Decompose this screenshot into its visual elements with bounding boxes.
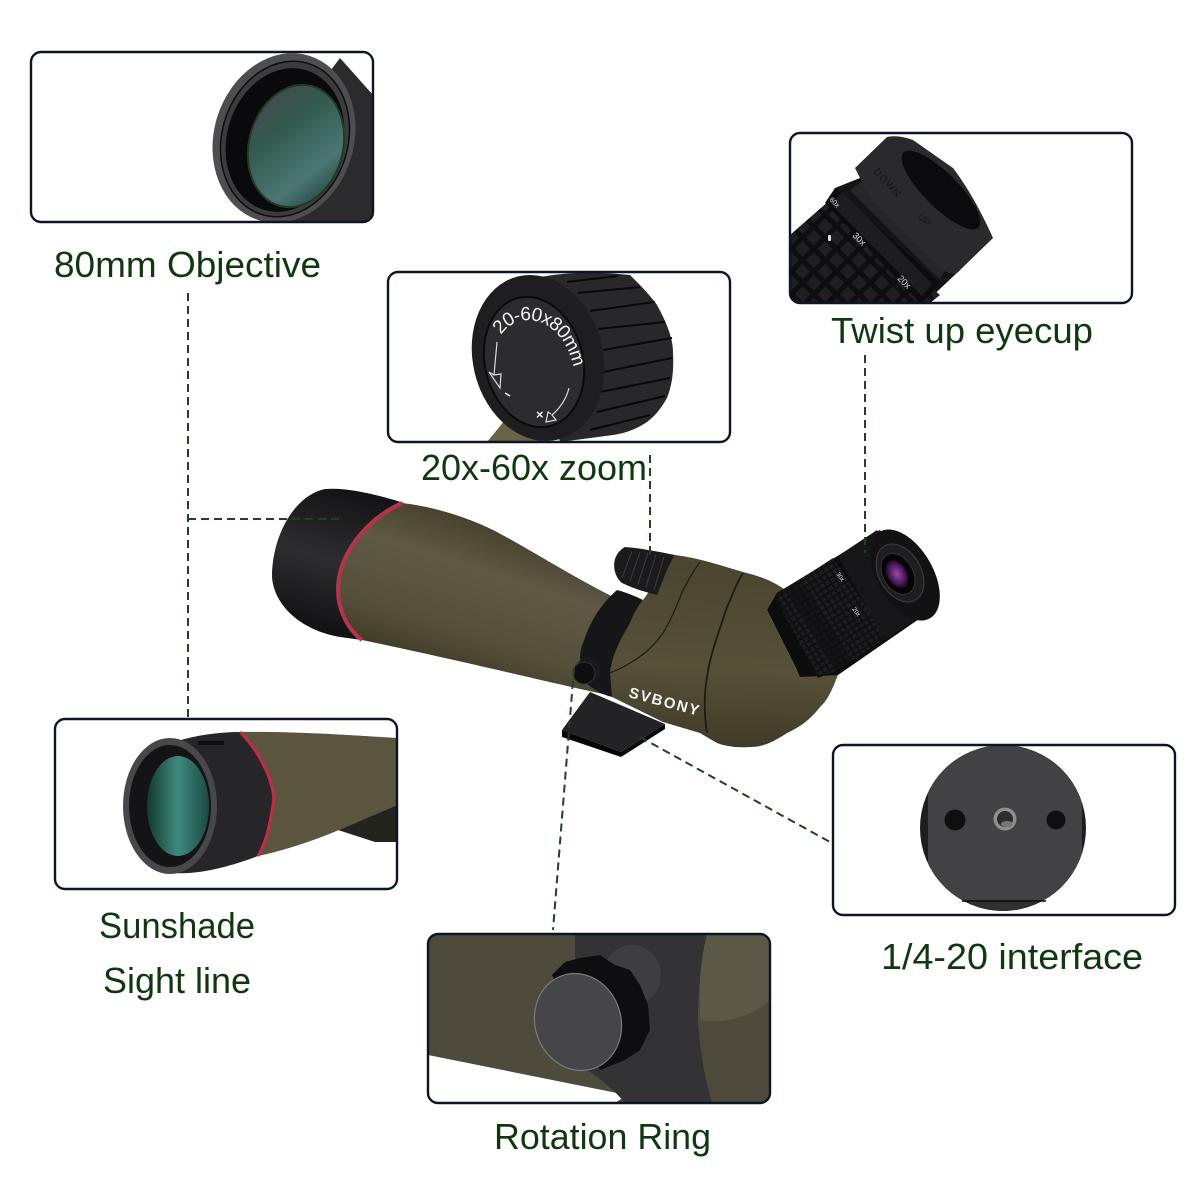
panel: 20x-60x zoom: 20-60x80mm: [493, 306, 583, 366]
heading: Sunshade Sight line: Sunshade: [99, 905, 255, 946]
scope body: [338, 503, 630, 696]
main product: spotting scope: [272, 489, 954, 757]
base ring: [767, 530, 932, 677]
eyepiece lens: [881, 556, 913, 592]
panel: twist up eyecup: DOWN: [871, 167, 903, 200]
scope sunshade: [272, 489, 404, 640]
panel: twist up eyecup: 60x: [828, 196, 841, 210]
panel: 1/4-20 interface: [833, 745, 1175, 915]
focus knob: [614, 547, 675, 595]
clamp ring: [580, 590, 643, 697]
center threaded hole: [994, 808, 1016, 830]
eyepiece: 20x: [850, 607, 861, 618]
red ring: [338, 503, 402, 640]
eyepiece: 30x: [834, 572, 845, 583]
housing seams: [610, 562, 743, 733]
panel: sunshade sight line: [55, 719, 397, 889]
panel: twist up eyecup: UP: [915, 212, 933, 229]
heading: 80mm Objective: 80mm Objective: [54, 244, 321, 285]
foot plate: [562, 692, 665, 757]
eyepiece: [767, 518, 954, 678]
panel: rotation ring: [428, 934, 770, 1103]
panel: 20x-60x zoom: [386, 270, 732, 444]
panel: twist up eyecup: 30x: [851, 230, 868, 248]
leader lines: [188, 293, 865, 930]
heading: 1/4-20 interface: 1/4-20 interface: [881, 936, 1143, 977]
grip: [775, 558, 887, 678]
heading: Rotation Ring: Rotation Ring: [494, 1116, 711, 1157]
prism housing: [610, 555, 838, 747]
heading: 20x-60x zoom: 20x-60x zoom: [421, 447, 647, 488]
eyecup: [838, 530, 930, 640]
panel: twist up eyecup: [790, 133, 1132, 303]
brand name: SVBONY: [627, 684, 701, 719]
right hole: [1046, 810, 1066, 830]
left hole: [944, 810, 966, 830]
panel: twist up eyecup: 20x: [896, 273, 913, 291]
panel: 20x-60x zoom: ×: [536, 407, 544, 422]
heading: Sunshade Sight line: [99, 905, 255, 1001]
heading: Sunshade Sight line: Sight line: [103, 960, 251, 1001]
panel: 80mm objective: [30, 50, 374, 224]
heading: Twist up eyecup: Twist up eyecup: [831, 310, 1093, 351]
clamp screw: [573, 658, 601, 684]
